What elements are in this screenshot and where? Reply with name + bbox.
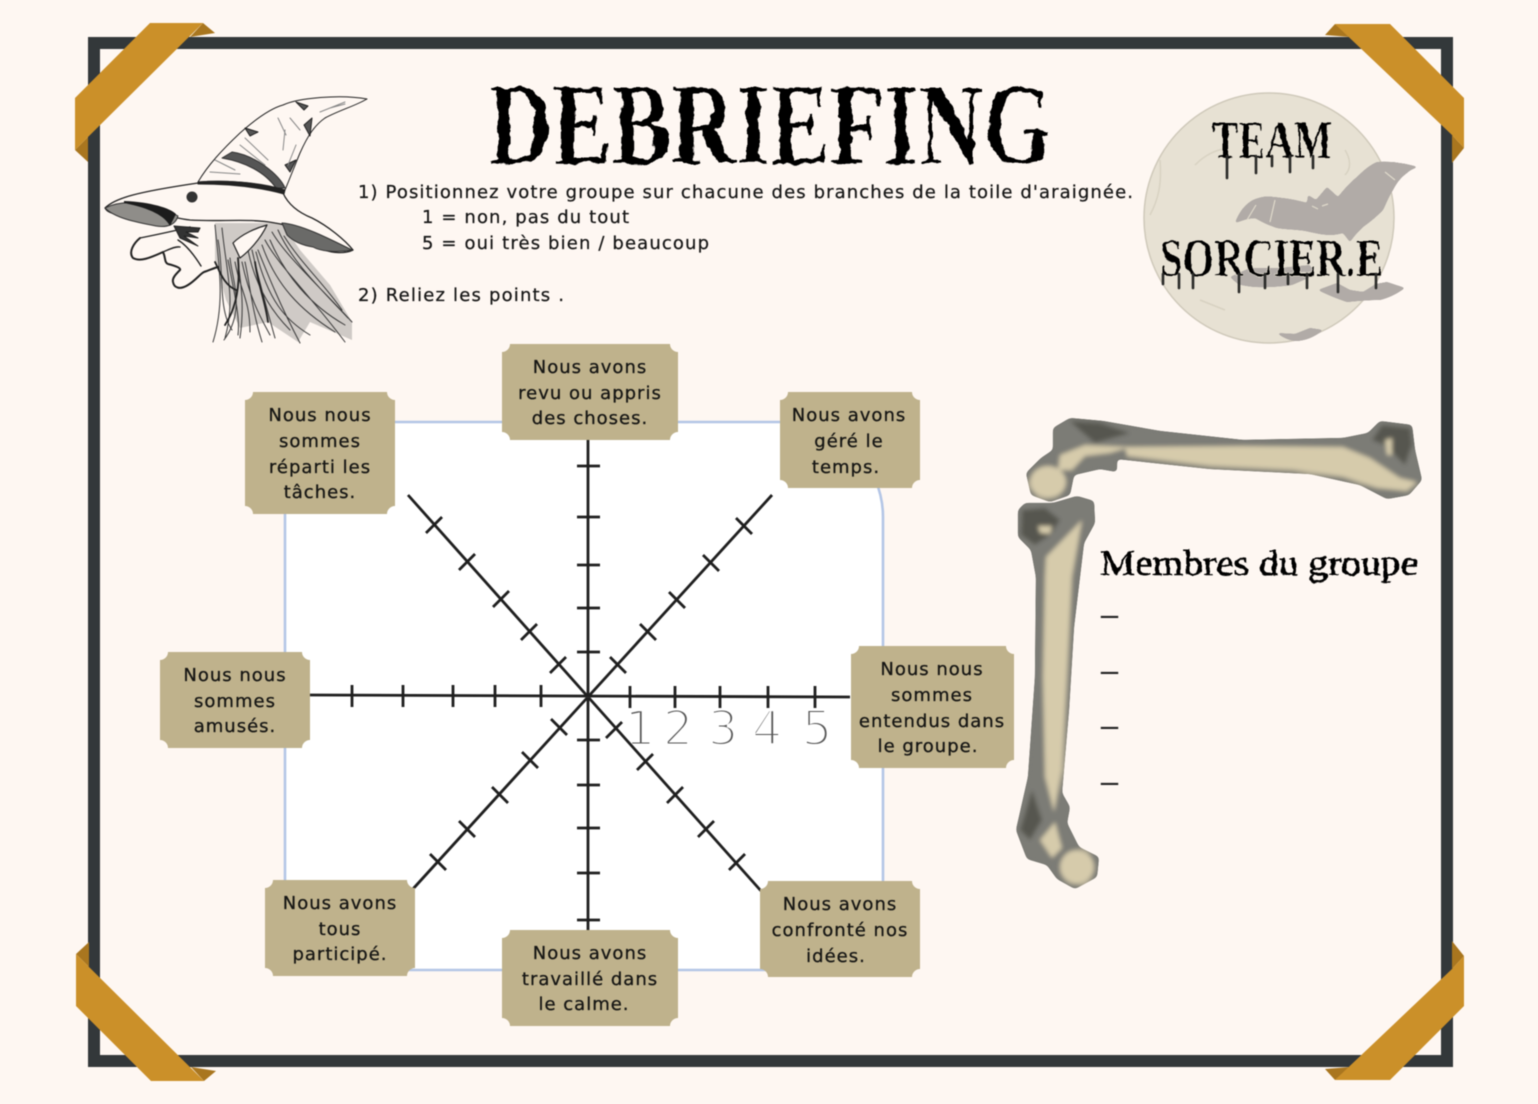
scale numbers: 3 [708, 701, 738, 757]
group members [1100, 543, 1418, 798]
icon: horizontal bone [1026, 418, 1422, 502]
title: DEBRIEFING [488, 59, 1052, 190]
witch hat cone [198, 97, 367, 190]
label: bottom: Nous avons [533, 943, 647, 964]
label: left: sommes [194, 691, 276, 712]
member lines: – [1100, 654, 1119, 687]
label: bottom: travaillé dans [522, 969, 658, 990]
label: bottom right: Nous avons [783, 894, 897, 915]
axes [310, 440, 850, 930]
label: bottom: le calme. [538, 994, 630, 1015]
instructions: 5 = oui très bien / beaucoup [422, 233, 709, 254]
panel: spider web chart [285, 422, 883, 970]
label: right: sommes [891, 685, 973, 706]
scale numbers: 4 [752, 701, 782, 757]
icon: bats [1230, 162, 1418, 341]
label: bottom right [760, 881, 920, 977]
witch hat brim [105, 183, 353, 253]
bat details [1247, 172, 1395, 222]
instructions: 1 = non, pas du tout [422, 207, 629, 228]
label: top: des choses. [532, 408, 648, 429]
label: left [160, 652, 310, 748]
label: bottom left [265, 880, 415, 976]
instructions [358, 182, 1133, 306]
label: bottom left: participé. [292, 944, 388, 965]
witch hair [213, 223, 352, 343]
scale numbers: 2 [663, 701, 693, 757]
label: bottom left: tous [319, 919, 361, 940]
icon: vertical bone [1016, 496, 1099, 889]
label: left: amusés. [194, 716, 276, 737]
label: top right: Nous avons [792, 405, 906, 426]
scale numbers [625, 701, 832, 757]
scale numbers: 5 [802, 701, 832, 757]
scale numbers: 1 [625, 701, 655, 757]
team badge: SORCIER.E [1160, 228, 1383, 288]
member lines: – [1100, 598, 1119, 631]
member lines [1100, 598, 1119, 798]
paint drips [1163, 156, 1376, 292]
label: top: revu ou appris [518, 383, 662, 404]
label: bottom right: idées. [806, 946, 866, 967]
chart background [285, 422, 883, 970]
witch face [131, 226, 218, 288]
label: top left: réparti les [269, 457, 371, 478]
label: top left: sommes [279, 431, 361, 452]
label: top right [780, 392, 920, 488]
label: left: Nous nous [183, 665, 287, 686]
moon [1144, 93, 1394, 343]
witch hat shading [198, 102, 345, 194]
instructions: 1) Positionnez votre groupe sur chacune des branches de la toile d'araignée. [358, 182, 1133, 203]
witch ear [233, 225, 267, 258]
label: right [851, 646, 1014, 768]
team badge [1144, 93, 1418, 343]
label: top [502, 344, 678, 440]
member lines: – [1100, 709, 1119, 742]
member lines: – [1100, 765, 1119, 798]
group heading: Membres du groupe [1100, 543, 1418, 583]
label: top right: temps. [812, 457, 880, 478]
label: top: Nous avons [533, 357, 647, 378]
instructions: 2) Reliez les points . [358, 285, 564, 306]
label: bottom left: Nous avons [283, 893, 397, 914]
label: bottom [502, 930, 678, 1026]
label: top left: tâches. [284, 482, 356, 503]
label: top right: géré le [814, 431, 884, 452]
witch brim underside [105, 201, 352, 251]
moon texture [1150, 148, 1350, 310]
label: right: Nous nous [880, 659, 984, 680]
icon: witch [105, 97, 367, 343]
team text: TEAM [1212, 110, 1332, 170]
label: right: le groupe. [878, 736, 978, 757]
label: top left: Nous nous [268, 405, 372, 426]
label: right: entendus dans [859, 711, 1005, 732]
label: top left [245, 392, 395, 514]
label: bottom right: confronté nos [772, 920, 908, 941]
